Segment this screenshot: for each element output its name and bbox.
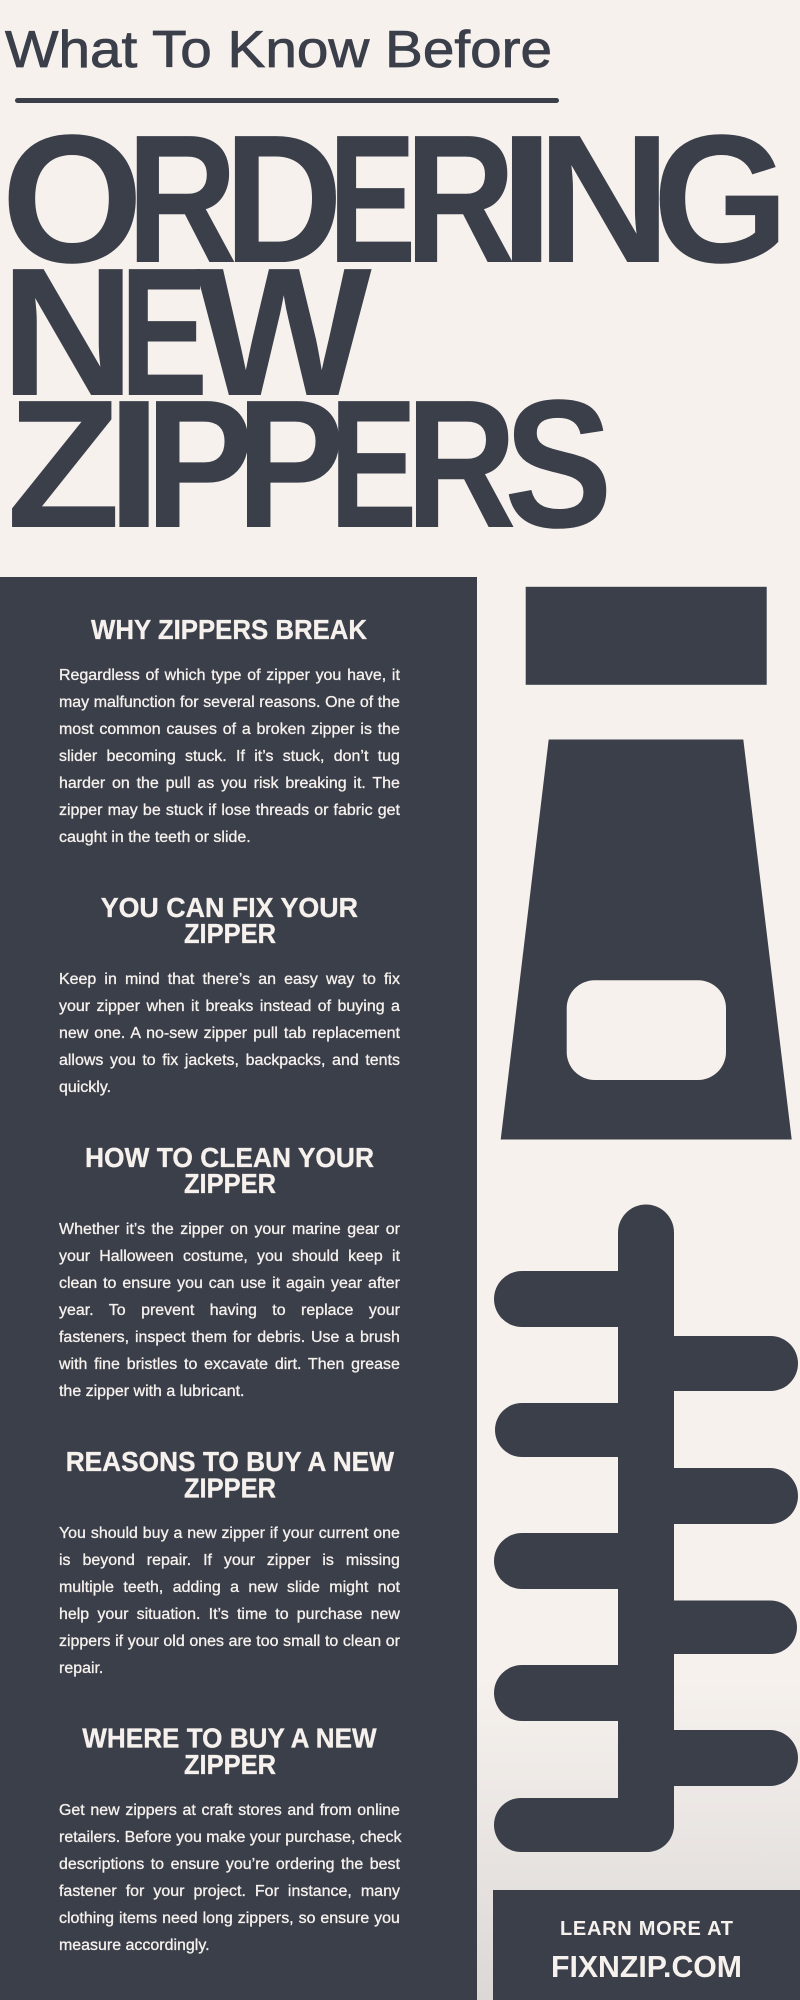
zipper spine (618, 1204, 674, 1852)
body text: your Halloween costume, you should keep it (59, 1248, 400, 1265)
heading: ZIPPER (184, 1472, 276, 1504)
section: why zippers break (59, 614, 400, 846)
body text (58, 971, 400, 1096)
body text: harder on the pull as you risk breaking it. The (59, 775, 400, 792)
title line: ORDERING: I (498, 96, 555, 301)
body text: year. To prevent having to replace your (59, 1302, 400, 1319)
title line: ZIPPERS (6, 361, 613, 567)
heading: ZIPPER (184, 1168, 276, 1199)
body text: clothing items need long zippers, so ensure you (59, 1910, 400, 1927)
heading: REASONS TO BUY A NEW (66, 1446, 394, 1477)
section: where to buy a new zipper (59, 1722, 402, 1954)
body text: help your situation. It’s time to purchase new (59, 1606, 400, 1623)
icon: zipper pull top bar (526, 586, 767, 685)
footer text: LEARN MORE AT (560, 1918, 733, 1940)
title line: NEW: E (120, 230, 208, 434)
callout: learn more footer (493, 1890, 800, 2000)
body text: caught in the teeth or slide. (59, 829, 251, 846)
title line: ORDERING: O (1, 96, 143, 301)
title line: NEW: W (196, 231, 372, 435)
body text: fasteners, inspect them for debris. Use a brush (59, 1329, 400, 1346)
heading (101, 892, 358, 949)
heading (82, 1722, 377, 1780)
title line: ORDERING (1, 96, 789, 302)
heading: HOW TO CLEAN YOUR (85, 1142, 374, 1173)
body text: new one. A no-sew zipper pull tab replacement (59, 1025, 400, 1042)
title line: NEW: N (0, 231, 135, 435)
title rule (15, 98, 559, 103)
body text: with fine bristles to excavate dirt. Then grease (59, 1356, 400, 1373)
section: you can fix your zipper (58, 892, 400, 1096)
body text: slider becoming stuck. If it’s stuck, don’t tug (59, 748, 400, 765)
body text: repair. (59, 1660, 103, 1677)
body text: Get new zippers at craft stores and from online (59, 1802, 400, 1819)
body text: zipper may be stuck if lose threads or fabric get (59, 802, 400, 819)
title line: ZIPPERS: P (145, 361, 254, 566)
body text: zippers if your old ones are too small to clean or (59, 1633, 400, 1650)
section: how to clean your zipper (58, 1142, 400, 1400)
panel: article text background (0, 577, 476, 2000)
body text (58, 1221, 400, 1400)
body text: Keep in mind that there’s an easy way to fix (59, 971, 400, 988)
heading (66, 1446, 394, 1504)
body text: measure accordingly. (59, 1937, 210, 1954)
body text: descriptions to ensure you’re ordering the best (59, 1856, 400, 1873)
title line: NEW (0, 230, 372, 435)
body text: quickly. (59, 1079, 111, 1096)
heading: YOU CAN FIX YOUR (101, 892, 358, 923)
body text: is beyond repair. If your zipper is missing (59, 1552, 400, 1569)
subtitle: What To Know Before: What To Know Before (5, 21, 552, 79)
body text (59, 1802, 402, 1954)
title line: ORDERING: G (652, 98, 789, 302)
body text (59, 667, 400, 846)
body text: your zipper when it breaks instead of buying a (59, 998, 400, 1015)
title line: ORDERING: N (537, 98, 671, 302)
body text: fastener for your project. For instance, many (59, 1883, 400, 1900)
heading: WHERE TO BUY A NEW (82, 1722, 377, 1753)
left teeth (494, 1271, 674, 1852)
body text: may malfunction for several reasons. One of the (59, 694, 400, 711)
title line: ORDERING: R (405, 96, 516, 301)
icon: zipper pull body with slot (500, 740, 792, 1140)
title line: ORDERING: E (328, 97, 416, 301)
section: reasons to buy a new zipper (59, 1446, 400, 1677)
body text: retailers. Before you make your purchase, check (59, 1829, 402, 1846)
title line: ZIPPERS: P (236, 361, 345, 566)
heading (85, 1142, 374, 1199)
body text: You should buy a new zipper if your current one (59, 1525, 400, 1542)
body text: most common causes of a broken zipper is the (59, 721, 400, 738)
title line: ZIPPERS: R (406, 361, 517, 566)
body text: allows you to fix jackets, backpacks, and tents (59, 1052, 400, 1069)
footer text: FIXNZIP.COM (551, 1949, 742, 1984)
footer text (551, 1918, 742, 1984)
title line: ORDERING: R (126, 96, 238, 301)
right teeth (640, 1336, 798, 1786)
body text: Whether it’s the zipper on your marine gear or (59, 1221, 400, 1238)
icon: zipper teeth (494, 1204, 798, 1852)
title line: ZIPPERS: E (329, 362, 417, 566)
main title: Ordering New Zippers (0, 96, 789, 567)
heading: WHY ZIPPERS BREAK (91, 614, 367, 645)
heading: ZIPPER (184, 918, 276, 949)
title line: ZIPPERS: Z (6, 363, 121, 567)
title line: ORDERING: D (224, 96, 343, 301)
title line: ZIPPERS: I (106, 361, 162, 566)
body text: the zipper with a lubricant. (59, 1383, 244, 1400)
body text: Regardless of which type of zipper you have, it (59, 667, 400, 684)
heading: ZIPPER (184, 1749, 276, 1780)
title line: ZIPPERS: S (504, 361, 613, 566)
body text: multiple teeth, adding a new slide might not (59, 1579, 400, 1596)
body text (59, 1525, 400, 1677)
body text: clean to ensure you can use it again year after (59, 1275, 400, 1292)
